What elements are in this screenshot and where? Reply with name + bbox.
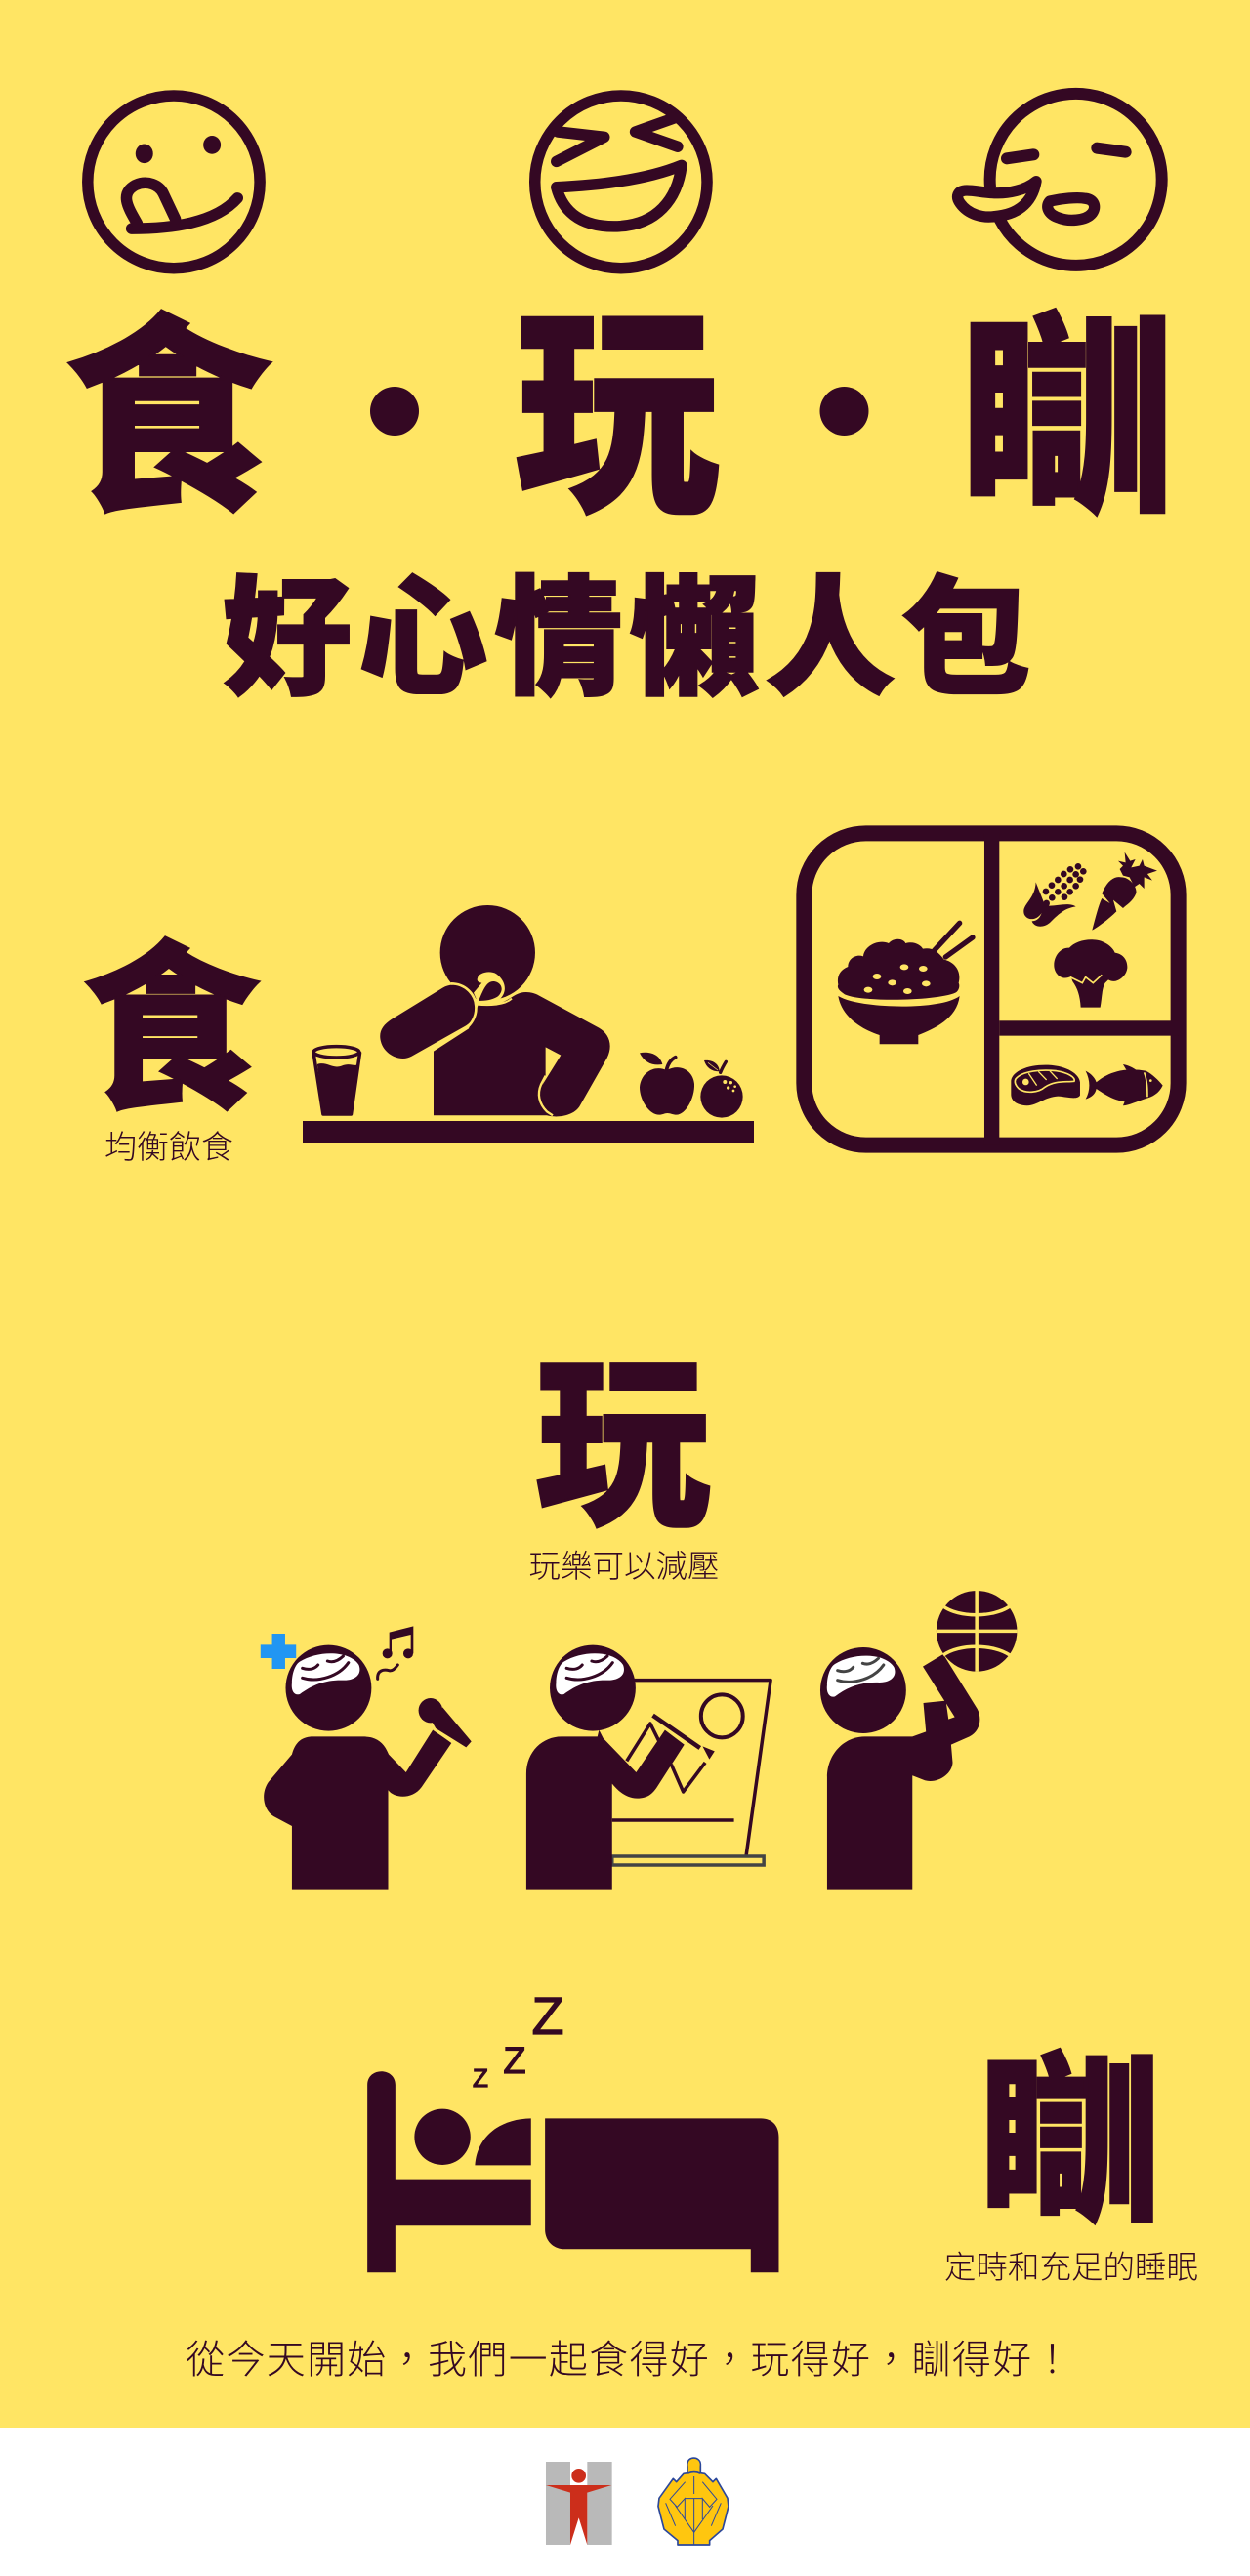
sleep Z letters	[473, 1987, 564, 2093]
fish	[1086, 1064, 1163, 1105]
title: 食·玩·瞓: 瞓	[961, 303, 1170, 538]
icon: laughing face	[535, 96, 707, 269]
illustration: person sleeping in bed	[367, 2071, 778, 2272]
illustration: person playing basketball	[820, 1591, 1017, 1890]
figure	[526, 1645, 685, 1890]
bed frame	[367, 2071, 531, 2272]
table	[303, 1121, 754, 1143]
icon: savouring face with tongue out	[958, 94, 1162, 266]
label: play reduces stress: 玩樂可以減壓	[528, 1549, 720, 1584]
icon: basketball	[937, 1591, 1017, 1672]
carrot	[1092, 852, 1157, 931]
head	[414, 2109, 471, 2165]
sleep Z letters: Z	[531, 1987, 564, 2046]
icon: tongue-licking smiley face	[88, 96, 260, 269]
illustration: person drawing on easel	[526, 1645, 771, 1890]
apple	[640, 1053, 694, 1115]
label: balanced diet: 均衡飲食	[104, 1129, 233, 1165]
title: 食·玩·瞓: 玩	[516, 289, 719, 541]
broccoli	[1054, 939, 1127, 1008]
orange	[700, 1060, 743, 1118]
glass	[313, 1047, 360, 1114]
easel	[612, 1681, 771, 1857]
plate frame	[804, 833, 1179, 1145]
logo: hands holding a person	[658, 2458, 729, 2545]
sleep Z letters: Z	[503, 2041, 526, 2082]
shoulder	[475, 2118, 531, 2165]
icon: music note	[378, 1626, 413, 1679]
illustration: meal plate with food groups	[804, 833, 1179, 1145]
steak	[1011, 1065, 1080, 1105]
subtitle: 好心情懶人包: 好心情懶人包	[223, 567, 1037, 711]
label: regular and sufficient sleep: 定時和充足的睡眠	[944, 2250, 1198, 2285]
figure	[264, 1645, 472, 1890]
blanket	[545, 2118, 778, 2272]
sleep Z letters: Z	[473, 2063, 488, 2093]
heading: 食 section: 食	[81, 931, 261, 1132]
title: 食·玩·瞓	[62, 289, 1170, 541]
closing sentence: 從今天開始，我們一起食得好，玩得好，瞓得好！	[186, 2339, 1073, 2382]
logo: red figure on grey	[546, 2462, 612, 2545]
heading: 玩 section: 玩	[536, 1342, 710, 1550]
icon: blue plus	[261, 1634, 296, 1669]
corn	[1023, 863, 1087, 927]
illustration: person singing	[261, 1634, 472, 1890]
illustration: person eating at table	[303, 905, 754, 1143]
heading: 瞓 section: 瞓	[979, 2044, 1157, 2243]
person	[380, 905, 610, 1116]
rice bowl	[838, 923, 973, 1044]
title: 食·玩·瞓: 食	[62, 303, 273, 538]
